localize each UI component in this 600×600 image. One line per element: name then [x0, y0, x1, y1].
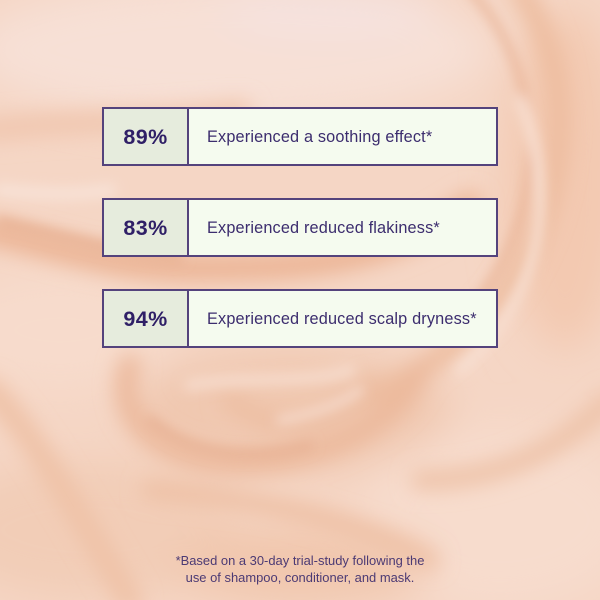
stat row: 89% soothing effect: [102, 107, 498, 166]
stat row: 94% reduced scalp dryness: [102, 289, 498, 348]
stat value: 94%: 94%: [123, 307, 168, 331]
stat value: 83%: [104, 200, 189, 255]
footnote: use of shampoo, conditioner, and mask.: [186, 570, 414, 584]
footnote: *Based on a 30-day trial-study following the: [176, 553, 424, 568]
stat value: 83%: 83%: [123, 216, 168, 240]
stat label: reduced scalp dryness: Experienced reduced scalp dryness*: [207, 310, 477, 328]
stat value: 94%: [104, 291, 189, 346]
stat label: soothing effect: Experienced a soothing effect*: [207, 128, 432, 146]
stat value: 89%: [104, 109, 189, 164]
stat label: reduced flakiness: Experienced reduced flakiness*: [207, 219, 440, 237]
stat value: 89%: 89%: [123, 125, 168, 149]
stat row: 83% reduced flakiness: [102, 198, 498, 257]
footnote: [176, 553, 424, 584]
